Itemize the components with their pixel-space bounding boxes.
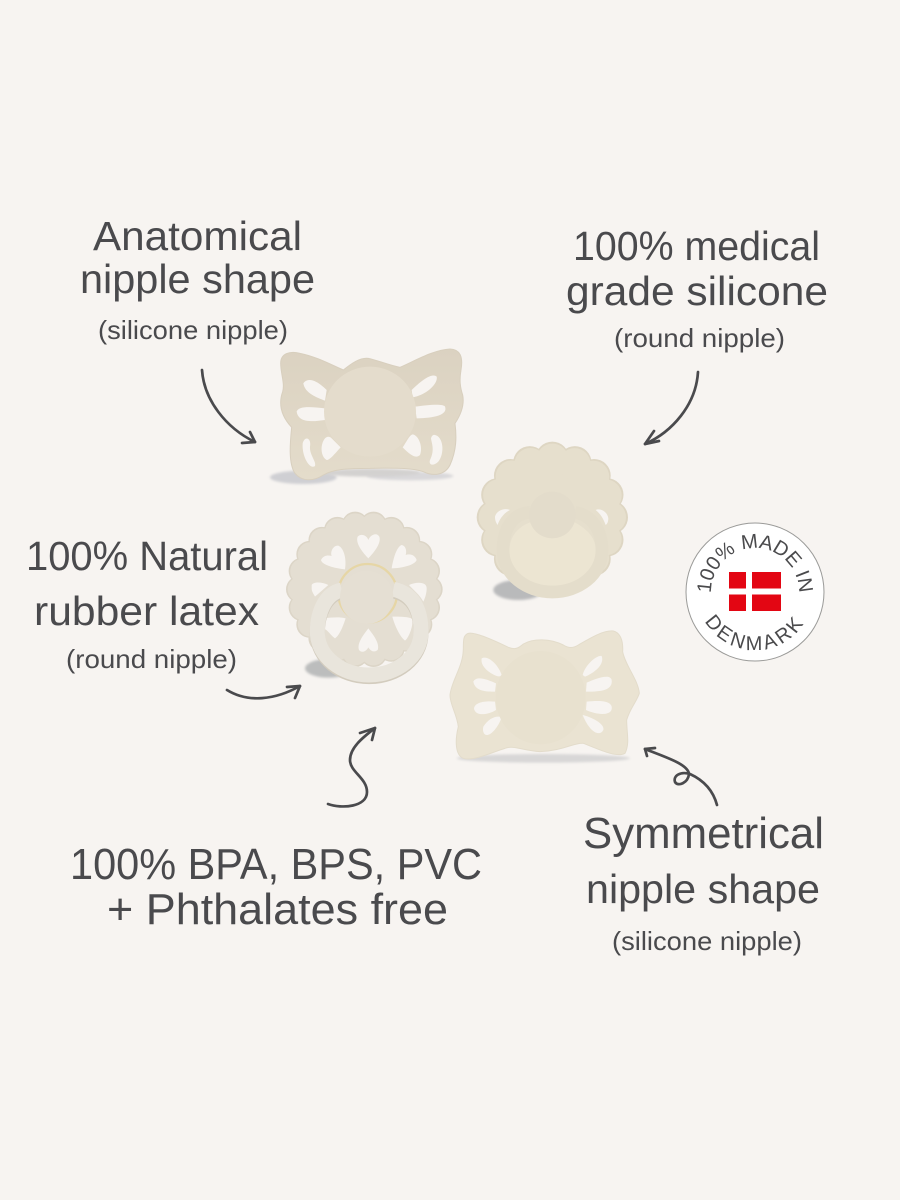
label: symmetrical nipple shape: (silicone nipple) (612, 926, 802, 956)
arrow: to anatomical pacifier (202, 370, 255, 443)
label: BPA free (70, 840, 482, 934)
label: natural rubber latex (26, 533, 268, 674)
label: medical grade silicone: 100% medical (573, 223, 820, 269)
label: natural rubber latex: rubber latex (34, 588, 260, 634)
label: medical grade silicone (566, 223, 828, 353)
arrow: squiggle to symmetrical pacifier (645, 748, 717, 805)
label: BPA free: + Phthalates free (107, 885, 448, 934)
badge: 100% made in Denmark (686, 522, 824, 662)
pacifier: symmetrical candy shape (450, 631, 639, 763)
pacifier: round scalloped with hearts (299, 524, 429, 678)
label: medical grade silicone: (round nipple) (614, 323, 785, 353)
arrow: to silicone pacifier (645, 372, 698, 444)
arrow: to latex pacifier (227, 686, 300, 698)
arrow: squiggle up to latex pacifier (328, 728, 375, 806)
label: anatomical nipple shape: nipple shape (80, 256, 315, 302)
label: natural rubber latex: 100% Natural (26, 533, 268, 579)
label: symmetrical nipple shape: Symmetrical (583, 809, 824, 858)
icon: Danish flag (729, 572, 781, 611)
label: anatomical nipple shape: Anatomical (93, 213, 302, 259)
label: anatomical nipple shape: (silicone nipple) (98, 315, 288, 345)
label: anatomical nipple shape (80, 213, 315, 345)
badge: 100% made in Denmark: 100% MADE IN (698, 534, 813, 592)
pacifier: butterfly anatomical (270, 349, 463, 484)
label: medical grade silicone: grade silicone (566, 268, 828, 314)
badge: 100% made in Denmark: DENMARK (705, 614, 804, 650)
label: symmetrical nipple shape (583, 809, 824, 956)
label: natural rubber latex: (round nipple) (66, 644, 237, 674)
pacifier: round scalloped solid (493, 458, 611, 600)
label: symmetrical nipple shape: nipple shape (586, 866, 820, 912)
label: BPA free: 100% BPA, BPS, PVC (70, 840, 482, 889)
